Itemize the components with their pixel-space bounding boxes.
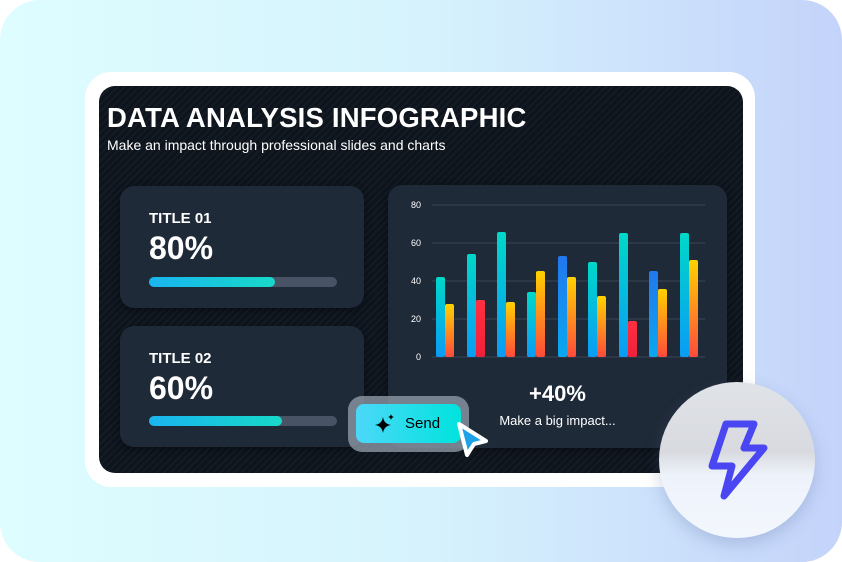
panel: title 01 — [120, 186, 364, 308]
stat caption: Make a big impact... — [499, 413, 616, 428]
bar chart — [411, 200, 705, 362]
white frame — [85, 72, 755, 487]
bar chart: 0 — [416, 352, 421, 362]
value: 80% — [149, 230, 213, 266]
title: DATA ANALYSIS INFOGRAPHIC — [107, 102, 527, 133]
icon: lightning circle — [659, 382, 815, 538]
subtitle: Make an impact through professional slides and charts — [107, 137, 446, 153]
bar chart: 60 — [411, 238, 421, 248]
label: TITLE 02 — [149, 350, 212, 367]
stat value: +40% — [529, 381, 586, 406]
label: TITLE 01 — [149, 210, 212, 227]
icon: sparkle — [375, 414, 394, 433]
send button — [348, 396, 469, 452]
bar chart: 40 — [411, 276, 421, 286]
dark slide — [99, 86, 743, 473]
bar chart: 20 — [411, 314, 421, 324]
panel: chart — [388, 185, 727, 448]
bar chart: 80 — [411, 200, 421, 210]
value: 60% — [149, 370, 213, 406]
progress bar — [149, 416, 337, 426]
label: Send — [405, 415, 440, 432]
progress bar — [149, 277, 337, 287]
panel: title 02 — [120, 326, 364, 447]
icon: cursor — [457, 422, 488, 458]
